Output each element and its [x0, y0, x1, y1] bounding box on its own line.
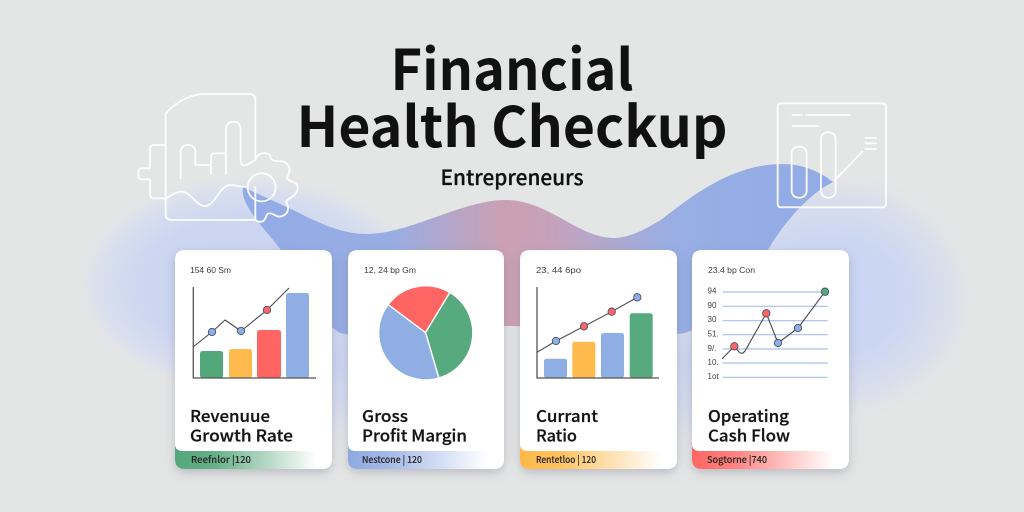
footer band — [348, 441, 504, 469]
card title — [708, 403, 790, 446]
line chart: 51. — [708, 330, 719, 338]
card title: Ratio — [536, 422, 577, 446]
pie chart — [379, 286, 473, 380]
line chart: 10. — [708, 358, 719, 367]
background halo: right — [684, 169, 980, 425]
card title: Currant — [536, 403, 598, 427]
source line: 154 60 Sm — [190, 266, 231, 275]
card title: Profit Margin — [362, 422, 467, 446]
subtitle: Entrepreneurs — [440, 162, 584, 192]
background halo: left card gap — [280, 265, 396, 455]
card title: Cash Flow — [708, 422, 790, 446]
background halo: right card gap — [630, 270, 760, 460]
footer label: Sogtorne |740 — [707, 452, 767, 466]
icon: document with chart and gear — [138, 94, 298, 222]
icon: report with bar chart — [778, 103, 886, 207]
bar and line chart — [537, 287, 659, 378]
card title — [190, 403, 293, 446]
source line: 23, 44 6po — [536, 266, 582, 275]
footer label: Nestcone | 120 — [362, 452, 422, 466]
line chart — [708, 286, 829, 381]
card title — [536, 403, 598, 446]
panel: revenue growth rate — [175, 250, 332, 469]
title: Financial — [390, 26, 634, 107]
line chart: 1ot — [708, 372, 719, 381]
title: Health Checkup — [296, 83, 728, 164]
panel: gross profit margin — [348, 250, 504, 469]
line chart: 90 — [708, 301, 717, 310]
background wave — [243, 164, 833, 337]
background halo: left — [73, 173, 427, 397]
card title — [362, 403, 467, 446]
footer band — [175, 441, 332, 469]
source line: 23.4 bp Con — [708, 266, 755, 275]
title — [296, 26, 728, 164]
panel: operating cash flow — [692, 250, 849, 469]
line chart: 30 — [708, 315, 717, 324]
footer label: Rentetloo | 120 — [536, 452, 596, 466]
line chart: 94 — [708, 286, 717, 296]
panel: current ratio — [520, 250, 677, 469]
bar and line chart — [193, 287, 316, 378]
card title: Growth Rate — [190, 422, 293, 446]
footer band — [692, 441, 849, 469]
source line: 12, 24 bp Gm — [364, 266, 416, 275]
line chart: 9/. — [708, 344, 716, 353]
card title: Gross — [362, 403, 408, 427]
card title: Revenuue — [190, 403, 270, 427]
footer band — [520, 441, 677, 469]
footer label: Reefnlor |120 — [191, 452, 251, 466]
card title: Operating — [708, 403, 789, 427]
